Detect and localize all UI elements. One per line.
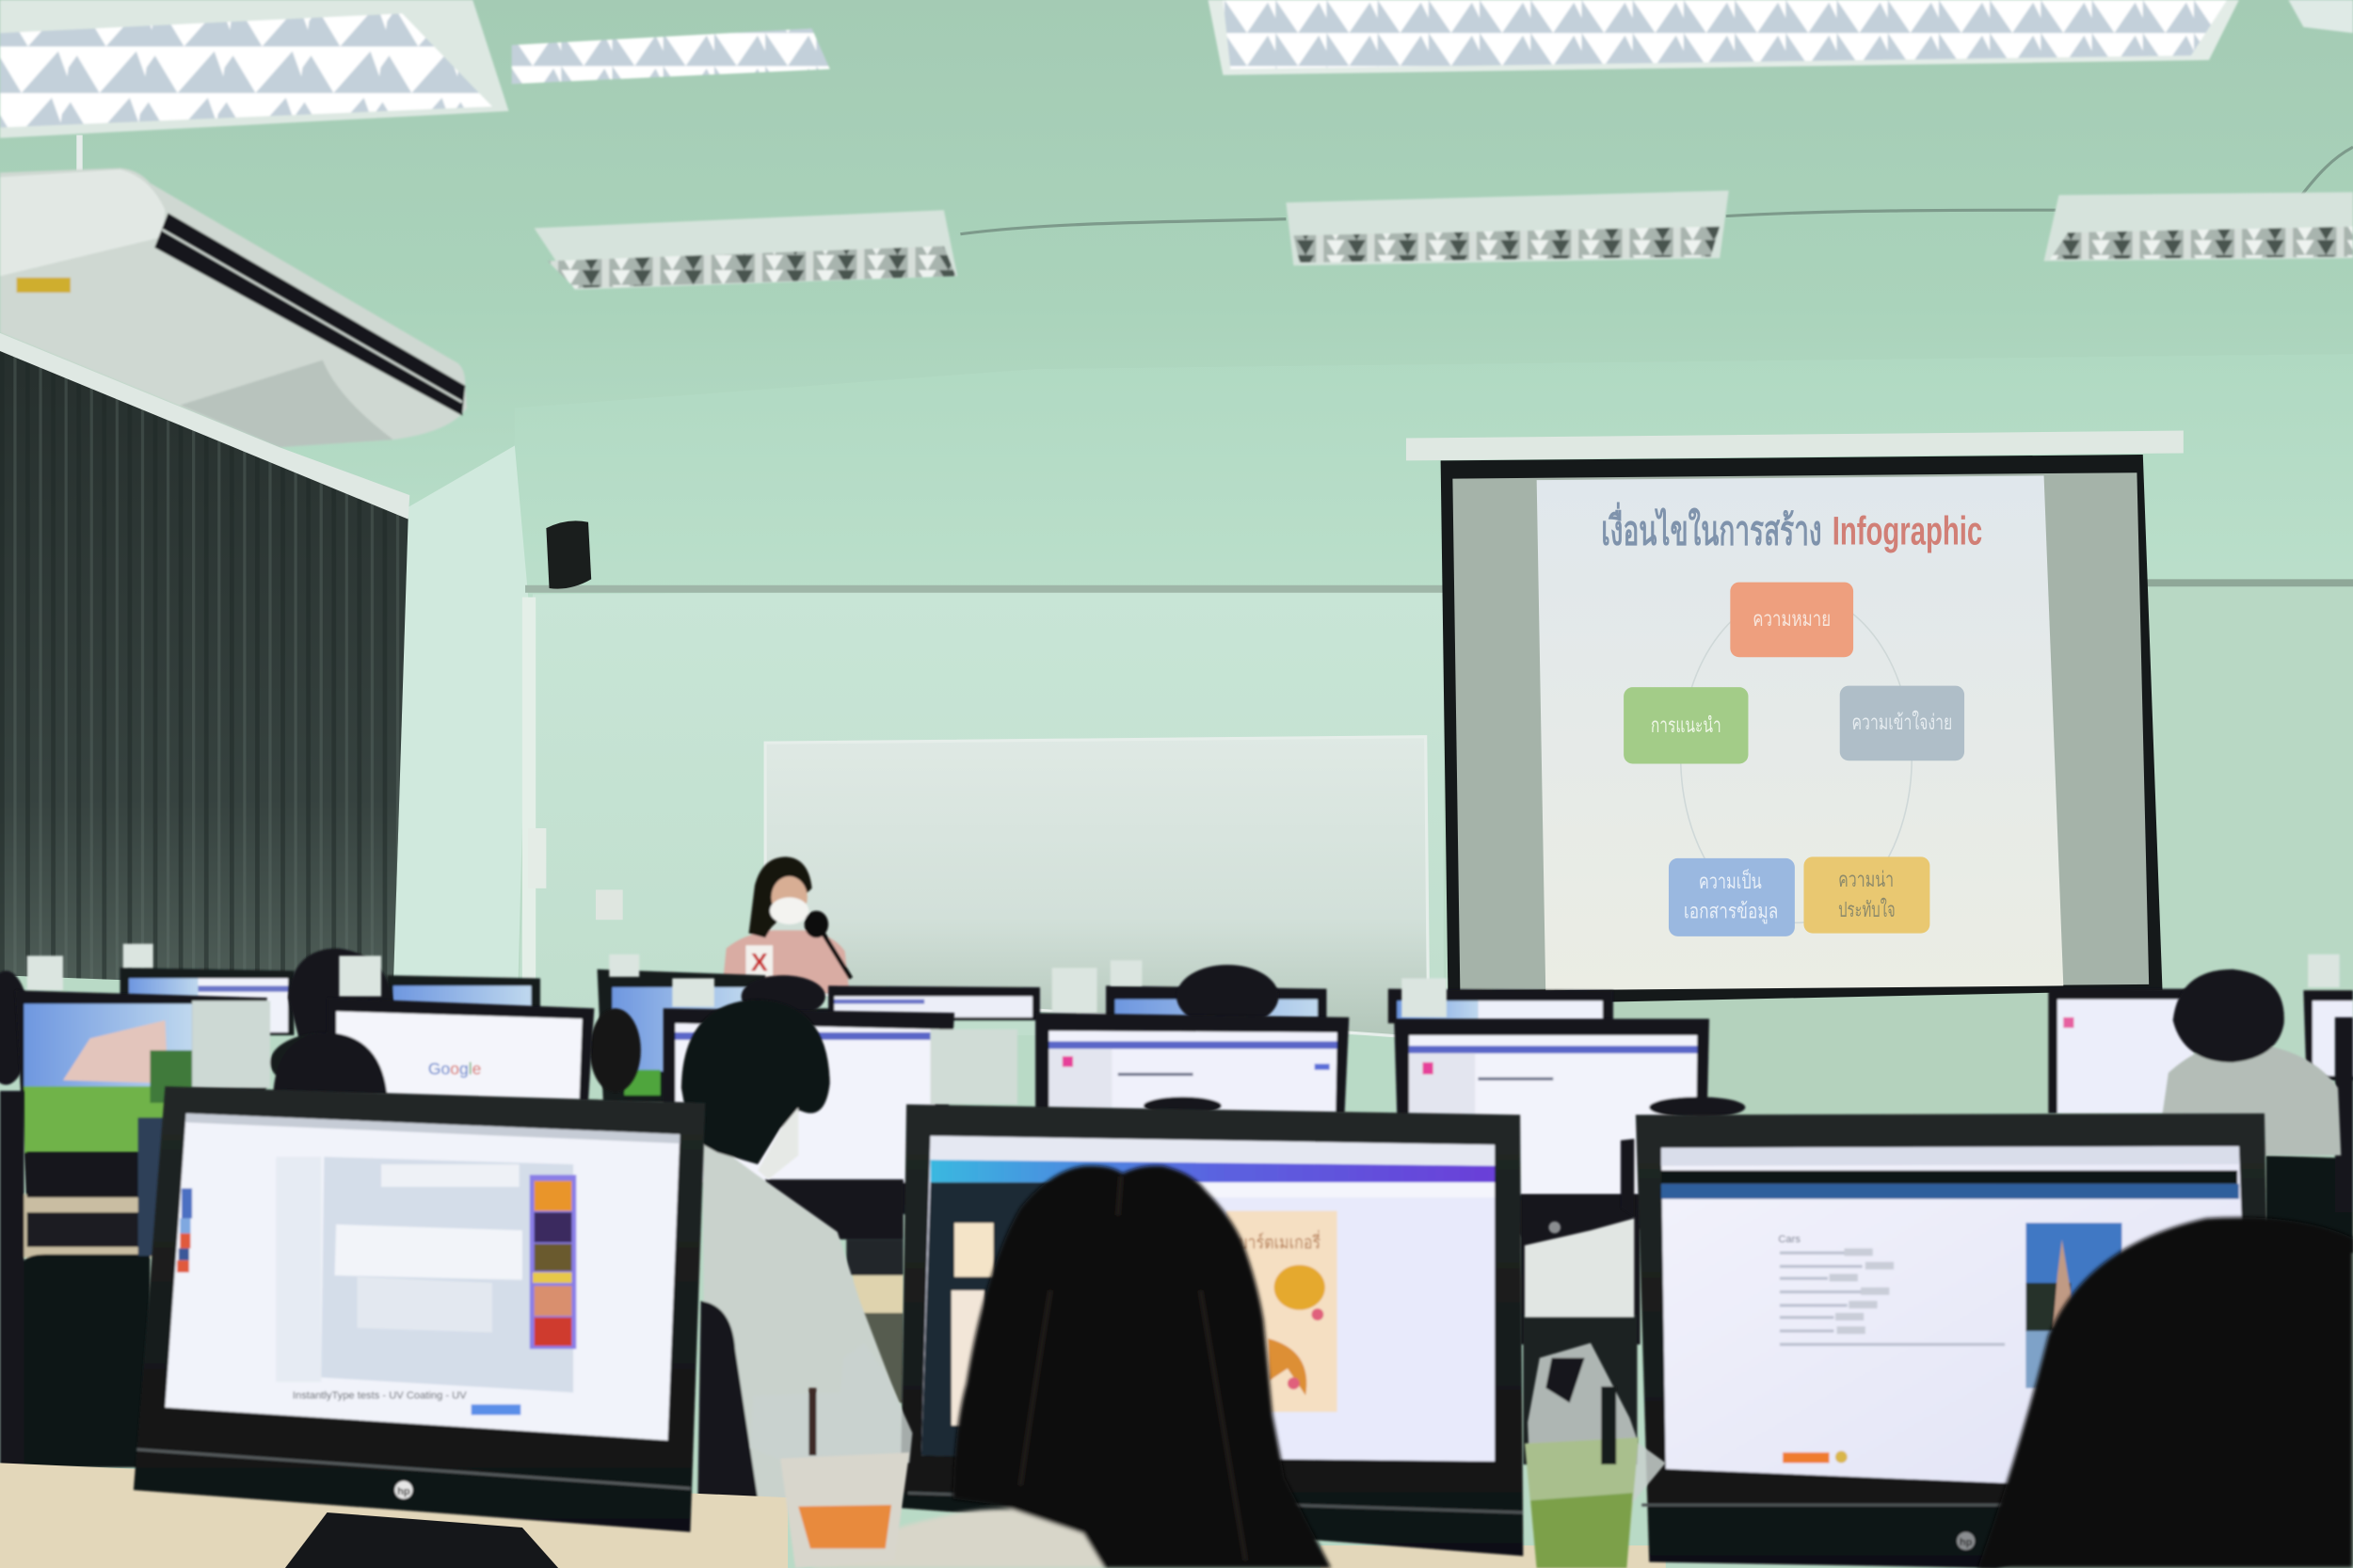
HP logo <box>1957 1532 1975 1550</box>
browser bar <box>931 1136 1495 1166</box>
monitor: far right <box>2303 990 2353 1080</box>
box: impressive: ความน่า <box>1838 868 1894 891</box>
box: guidance <box>1624 687 1748 763</box>
monitor bezel <box>901 1104 1523 1556</box>
screen <box>921 1136 1495 1462</box>
presenter face <box>772 876 808 919</box>
monitor: Google page <box>273 998 594 1101</box>
ceiling lights <box>0 0 2353 290</box>
box: documentation: เอกสารข้อมูล <box>1684 900 1778 924</box>
browser bar <box>1661 1146 2239 1166</box>
projector screen <box>1406 431 2184 1005</box>
straw <box>1601 1386 1616 1464</box>
plastic cup left <box>750 1343 912 1568</box>
light: top centre <box>1208 0 2239 75</box>
price tags <box>1288 1308 1323 1389</box>
front monitor left: typing test <box>134 1086 705 1532</box>
game strip <box>530 1175 576 1349</box>
exercise photo <box>2025 1223 2121 1388</box>
presenter hair <box>749 856 812 937</box>
melon bread <box>1274 1265 1325 1310</box>
front row desks, keyboards and chairs <box>0 1017 2353 1505</box>
head <box>681 1000 830 1164</box>
presenter body <box>722 930 849 993</box>
HP logo <box>394 1481 412 1499</box>
under desk <box>858 1313 904 1403</box>
bag handle hole <box>1545 1358 1585 1403</box>
plastic bag <box>750 1343 912 1463</box>
blue button <box>472 1404 520 1415</box>
bezel line <box>1641 1504 2041 1506</box>
front middle table <box>1321 1545 1666 1568</box>
exercise sentence lines <box>1780 1248 2005 1346</box>
canva side panel <box>921 1182 1053 1459</box>
keyboard <box>357 1277 492 1333</box>
box: documentation: ความเป็น <box>1699 868 1762 893</box>
keyboard far left <box>27 1212 141 1247</box>
light: middle right <box>2044 192 2353 261</box>
monitor: centre <box>1035 1013 1349 1115</box>
screen <box>165 1113 680 1440</box>
monitor bezel <box>134 1086 705 1532</box>
far right chair <box>2266 1156 2353 1253</box>
monitor: centre right <box>1394 1019 1745 1240</box>
centre desk <box>853 1275 904 1313</box>
centre keyboard <box>846 1240 904 1275</box>
second thumbnail <box>952 1290 984 1426</box>
far right dark column <box>2335 1017 2353 1212</box>
right chair <box>1523 1315 1637 1464</box>
exercise heading: Cars <box>1778 1234 1801 1245</box>
typing text box <box>335 1224 522 1280</box>
plastic cup right <box>1525 1343 1666 1568</box>
box: easy to understand: ความเข้าใจง่าย <box>1851 711 1952 734</box>
slide title accent: Infographic <box>1833 509 1982 554</box>
plastic bag <box>1528 1343 1666 1508</box>
student: long dark hair right <box>1977 1217 2353 1568</box>
orange check button <box>1783 1452 1830 1463</box>
screen grey side area <box>1452 472 2149 990</box>
light: middle centre <box>1286 190 1729 265</box>
monitor: right <box>2048 989 2194 1113</box>
front monitor centre: Canva editor <box>901 1104 1523 1556</box>
microphone <box>805 911 851 978</box>
box: meaning <box>1730 583 1853 657</box>
back row monitors <box>120 968 1613 1103</box>
student: man in white shirt <box>681 1000 909 1500</box>
HP logo: hp <box>1960 1537 1973 1548</box>
centre monitor lower bezel <box>765 1179 904 1240</box>
box: impressive: ประทับใจ <box>1838 898 1896 921</box>
social icons <box>177 1189 192 1272</box>
front monitor right: exercise page <box>1636 1113 2272 1568</box>
light: middle left <box>535 210 957 290</box>
orange drink <box>798 1505 891 1548</box>
wall speaker <box>546 520 591 589</box>
presenter mask <box>770 897 808 924</box>
monitor: Google page: Google <box>428 1059 481 1078</box>
box: easy to understand <box>1840 686 1964 760</box>
student: right shirt and head <box>1525 1139 1634 1318</box>
shirt <box>702 1134 909 1500</box>
second row monitors <box>15 989 2353 1240</box>
box: impressive <box>1803 856 1929 934</box>
straw <box>808 1388 816 1455</box>
face mask <box>758 1108 798 1179</box>
chair back <box>697 1301 758 1499</box>
front left table <box>0 1463 788 1568</box>
screen black frame <box>1441 455 2163 1005</box>
bakery poster <box>1226 1211 1337 1412</box>
coin icon <box>1835 1451 1848 1463</box>
window curtain <box>0 333 409 990</box>
student: long dark hair centre <box>810 1166 1331 1568</box>
black nav bar <box>1661 1171 2237 1184</box>
canva header <box>931 1160 1495 1182</box>
page caption: InstantlyType tests - UV Coating - UV <box>293 1390 467 1401</box>
green drink <box>1530 1493 1633 1568</box>
hair highlights <box>1020 1176 1245 1560</box>
light: top left small <box>512 28 830 84</box>
whiteboard <box>765 737 1429 1038</box>
tab bar <box>186 1113 680 1144</box>
connecting ring <box>1681 593 1912 922</box>
croissant <box>1268 1338 1306 1396</box>
ad banner <box>381 1164 520 1187</box>
left desk strip <box>24 1194 153 1257</box>
slide title: เงื่อนไขในการสร้าง <box>1601 503 1822 554</box>
poster title: บาร์ตเมเกอรี่ <box>1238 1229 1321 1253</box>
presenter <box>722 856 851 993</box>
students seated behind second row <box>0 949 1278 1093</box>
cup body <box>1525 1437 1639 1568</box>
hair <box>952 1166 1331 1568</box>
white canvas bar <box>1053 1182 1495 1197</box>
light: top right corner <box>2288 0 2353 33</box>
monitor: centre left <box>664 1008 1017 1219</box>
X sign card: X <box>751 947 768 976</box>
far side paper signs <box>27 944 2340 1017</box>
HP logo: hp <box>397 1486 410 1497</box>
cup body <box>780 1452 909 1568</box>
wall switches <box>528 828 623 920</box>
monitor stand left <box>285 1512 558 1568</box>
box: meaning: ความหมาย <box>1753 607 1831 631</box>
X sign card <box>745 945 773 977</box>
left chair <box>21 1255 150 1467</box>
monitor base far left <box>27 1152 144 1197</box>
side navigation <box>276 1157 321 1382</box>
box: guidance: การแนะนำ <box>1651 713 1721 737</box>
left edge monitor <box>0 1091 24 1505</box>
box: documentation <box>1669 858 1795 936</box>
screen housing <box>1406 431 2184 460</box>
monitor bezel <box>1636 1113 2272 1568</box>
shoulders <box>810 1509 1118 1568</box>
site panel <box>321 1157 573 1392</box>
student: grey jacket far right <box>2156 969 2341 1156</box>
gap behind right monitor <box>1520 1194 1641 1344</box>
monitor: campus wallpaper <box>15 990 384 1204</box>
sleeve by left monitor <box>138 1118 165 1256</box>
light: top left <box>0 0 508 138</box>
air conditioner <box>0 168 467 447</box>
blue nav bar <box>1661 1184 2239 1199</box>
screen <box>1661 1146 2247 1485</box>
template thumbnail <box>954 1223 993 1277</box>
projected slide <box>1537 475 2063 990</box>
bezel line <box>908 1493 1523 1512</box>
bezel highlight <box>136 1449 690 1489</box>
